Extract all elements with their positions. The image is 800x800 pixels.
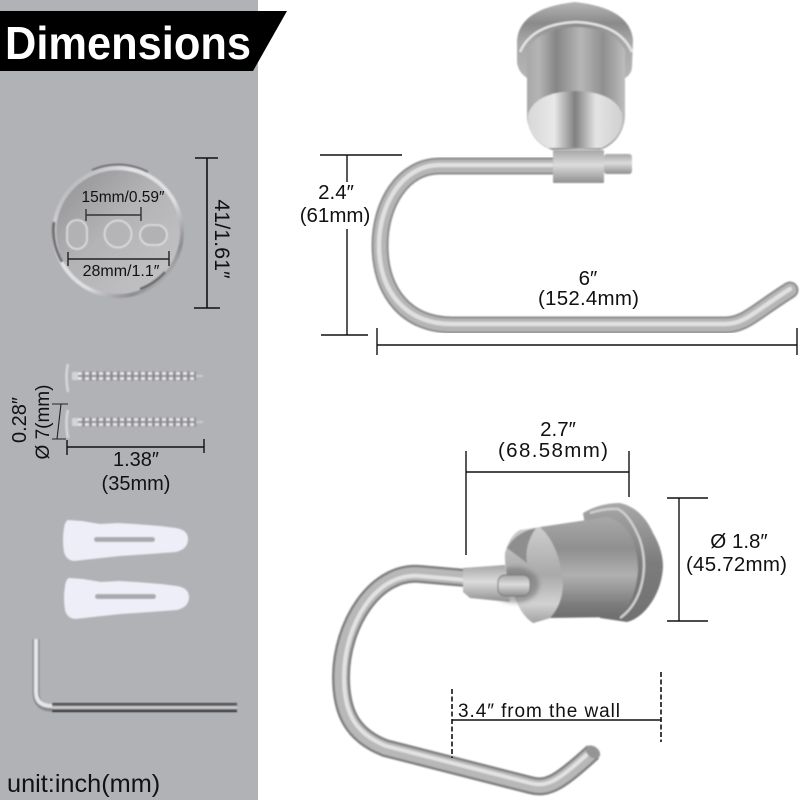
dimension: 2.4 inch arm height [300, 155, 402, 335]
dimension: 6 inch width: (152.4mm) [538, 287, 639, 310]
hex key [36, 639, 237, 711]
top view: wall mount [517, 2, 633, 150]
screw diameter dimension: 0.28″ [9, 397, 31, 443]
screw diameter dimension: Ø 7(mm) [33, 385, 54, 459]
screws [66, 364, 203, 438]
screw length dimension [67, 439, 204, 495]
wall anchors [63, 520, 189, 619]
dimension: 6 inch width: 6″ [579, 267, 597, 290]
unit note: unit:inch(mm) [7, 770, 160, 798]
dimension: 1.8 inch diameter: (45.72mm) [686, 553, 787, 576]
dimension: 1.8 inch diameter: Ø 1.8″ [710, 530, 768, 553]
side view: towel ring arm [341, 574, 603, 786]
screw length dimension: 1.38″ [113, 449, 159, 471]
dimension: 2.7 inch depth [466, 418, 629, 555]
dimension: 2.7 inch depth: 2.7″ [540, 418, 576, 441]
screw length dimension: (35mm) [102, 473, 170, 495]
mounting plate with hole dimensions: 15mm/0.59″ [81, 189, 165, 206]
screw diameter dimension [9, 385, 68, 459]
mounting plate with hole dimensions: 28mm/1.1″ [83, 263, 160, 280]
plate height dimension: 41/1.61″ [210, 199, 234, 279]
mounting plate with hole dimensions [53, 165, 182, 296]
panel: grey hardware background [0, 0, 258, 800]
dimension: 3.4 inch from the wall: 3.4″ from the wall [458, 701, 620, 722]
dimension: 2.4 inch arm height: 2.4″ [318, 181, 354, 204]
title banner: Dimensions [5, 17, 251, 69]
top view: towel ring arm [379, 165, 790, 325]
plate height dimension [194, 158, 234, 308]
dimension: 2.4 inch arm height: (61mm) [300, 204, 370, 227]
top view: clip and pin [553, 150, 632, 183]
dimension: 2.7 inch depth: (68.58mm) [498, 439, 608, 462]
dimension: 1.8 inch diameter [667, 498, 787, 621]
dimension: 6 inch width [377, 267, 797, 355]
side view: wall mount [463, 503, 663, 623]
